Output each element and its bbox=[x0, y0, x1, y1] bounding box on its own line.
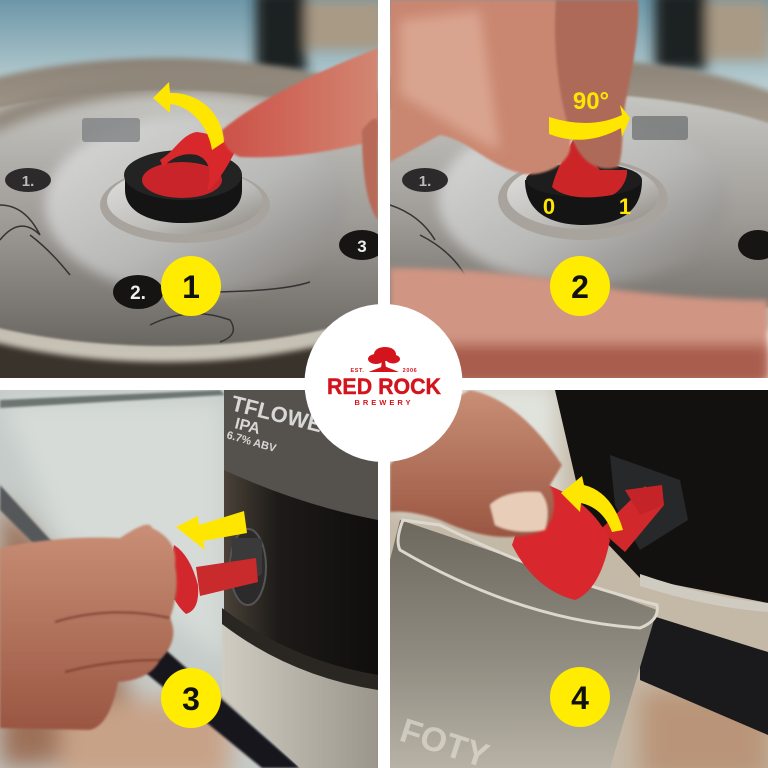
valve base and cap bbox=[498, 140, 668, 240]
valve base and cap bbox=[100, 132, 270, 243]
red tap key bbox=[172, 545, 258, 614]
badge: step number 1 bbox=[161, 256, 221, 316]
logo text: RED ROCK: RED ROCK bbox=[327, 374, 441, 399]
photo background bbox=[390, 390, 768, 768]
tap socket bbox=[230, 529, 266, 605]
keg body bbox=[222, 390, 384, 768]
number badges on keg: 2. bbox=[130, 283, 146, 304]
badge: step number 2: 2 bbox=[571, 269, 589, 305]
panel: step 1 bbox=[0, 0, 510, 380]
badge: step number 4 bbox=[550, 667, 610, 727]
badge: step number 2 bbox=[550, 256, 610, 316]
arrow: curved anticlockwise bbox=[561, 476, 623, 532]
hand bbox=[0, 525, 177, 730]
arrow: horizontal curved yellow bbox=[549, 105, 630, 140]
keg label text bbox=[227, 395, 320, 452]
keg body bbox=[555, 390, 768, 735]
panel: step 2 bbox=[390, 0, 768, 378]
photo background: sky bbox=[0, 0, 378, 100]
label: 90 degrees: 90° bbox=[573, 88, 609, 115]
number badges on keg: 1. bbox=[22, 173, 34, 190]
keg label text: 6.7% ABV bbox=[225, 429, 278, 455]
table frame bbox=[0, 390, 300, 768]
hand bbox=[390, 390, 562, 537]
arrow: pull outwards bbox=[176, 511, 247, 550]
keg lid bbox=[0, 54, 378, 378]
logo text: BREWERY: BREWERY bbox=[354, 398, 414, 407]
panel: step 3 bbox=[0, 390, 384, 768]
keg label text: IPA bbox=[233, 415, 262, 438]
red tap key bbox=[512, 484, 664, 600]
photo background bbox=[390, 0, 768, 100]
logo text: EST. 2006: EST. bbox=[350, 368, 365, 374]
number badges on keg bbox=[5, 168, 385, 309]
label: position 1: 1 bbox=[619, 194, 631, 219]
badge: step number 3: 3 bbox=[182, 681, 200, 717]
keg label text: TFLOWE bbox=[229, 391, 325, 437]
badge: step number 1: 1 bbox=[182, 269, 200, 305]
hand: fingers pinching bbox=[390, 0, 768, 385]
badge: step number 3 bbox=[161, 668, 221, 728]
photo background bbox=[0, 390, 300, 768]
keg lid: 1. bbox=[419, 173, 431, 190]
finger bbox=[222, 48, 378, 157]
drinking glass bbox=[390, 520, 657, 768]
logo roundel: Red Rock Brewery: 2006 bbox=[403, 368, 417, 374]
number badges on keg: 3 bbox=[357, 237, 367, 256]
badge: step number 4: 4 bbox=[571, 680, 589, 716]
arrow: curved yellow bbox=[153, 82, 224, 150]
keg lid bbox=[390, 58, 768, 332]
label: position 0: 0 bbox=[543, 194, 555, 219]
logo roundel: Red Rock Brewery bbox=[304, 304, 462, 462]
icon: tree on rock bbox=[368, 347, 400, 372]
panel: step 4 bbox=[390, 380, 768, 768]
